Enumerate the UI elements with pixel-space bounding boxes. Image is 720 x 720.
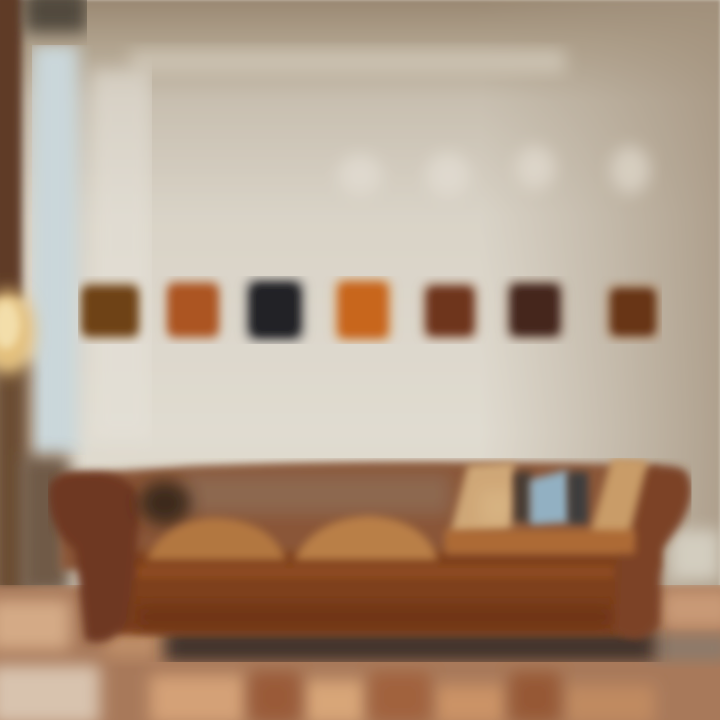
sofa seat base xyxy=(115,552,640,634)
throw pillows xyxy=(450,462,515,535)
dark cushion left xyxy=(139,481,191,525)
seat cushions xyxy=(146,518,286,560)
sofa back xyxy=(60,462,660,570)
left dark column and lamp xyxy=(0,0,87,600)
left arm xyxy=(48,472,140,642)
sofa shadow xyxy=(165,630,655,662)
sofa xyxy=(48,458,691,662)
right arm xyxy=(615,466,691,639)
floor xyxy=(0,585,720,720)
colour swatches xyxy=(78,276,662,344)
window xyxy=(32,45,152,455)
